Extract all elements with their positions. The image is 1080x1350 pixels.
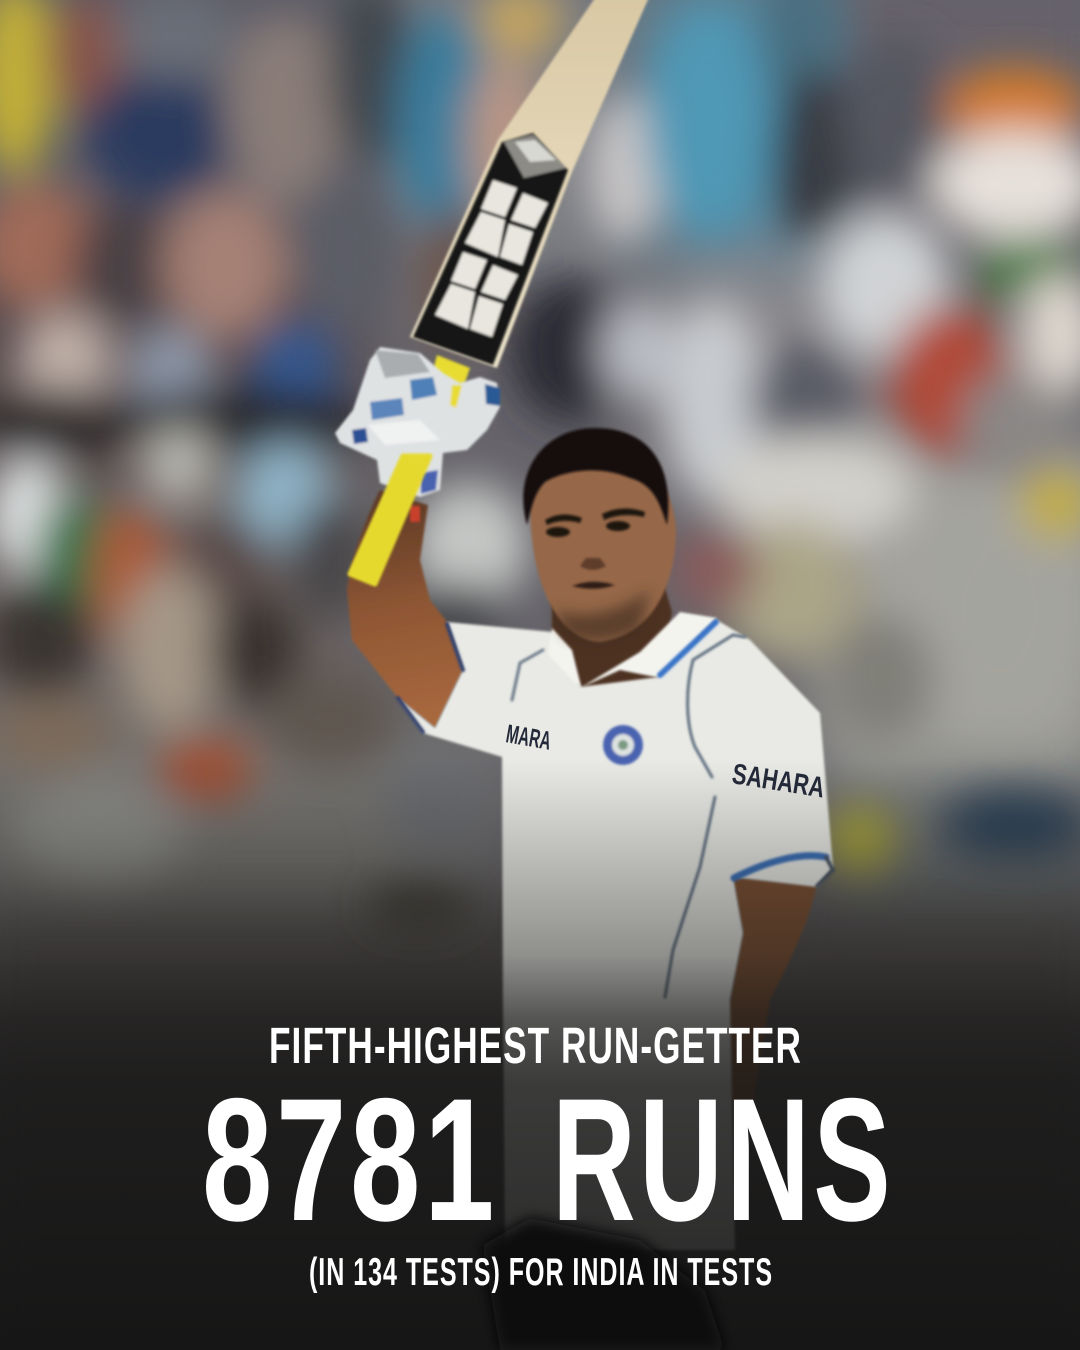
sponsor logos [504,718,827,804]
number: 8781 [202,1063,498,1258]
face [530,452,676,642]
heading: fifth-highest run-getter: FIFTH-HIGHEST RUN-GETTER [269,1017,802,1074]
collar [548,612,717,690]
hair [523,428,668,525]
neck [552,585,672,690]
bat blade [410,0,650,368]
facial features [545,508,645,589]
red wristband mark [410,506,420,522]
shirt trim [398,622,833,997]
chest sponsor: MARA [504,718,554,756]
stubble shadow [555,590,650,641]
far arm [712,877,817,1110]
upper S blocks [465,180,548,265]
bat sticker [413,133,568,365]
dark trouser and bat shadow [482,1218,725,1350]
india crest [603,725,643,765]
raised arm [347,490,463,728]
bat handle upper [425,355,470,420]
sleeve sponsor: SAHARA [730,758,827,804]
bat handle lower [350,456,430,584]
batsman [335,0,833,1250]
shirt [398,620,833,1250]
bottom dark gradient [0,760,1080,1350]
glove [335,347,500,497]
unit: RUNS [552,1063,894,1258]
headline number and unit: 8781 runs [202,1063,894,1258]
lower S blocks [435,252,518,337]
subheading: in 134 tests: (IN 134 TESTS) FOR INDIA IN TESTS [309,1251,773,1294]
